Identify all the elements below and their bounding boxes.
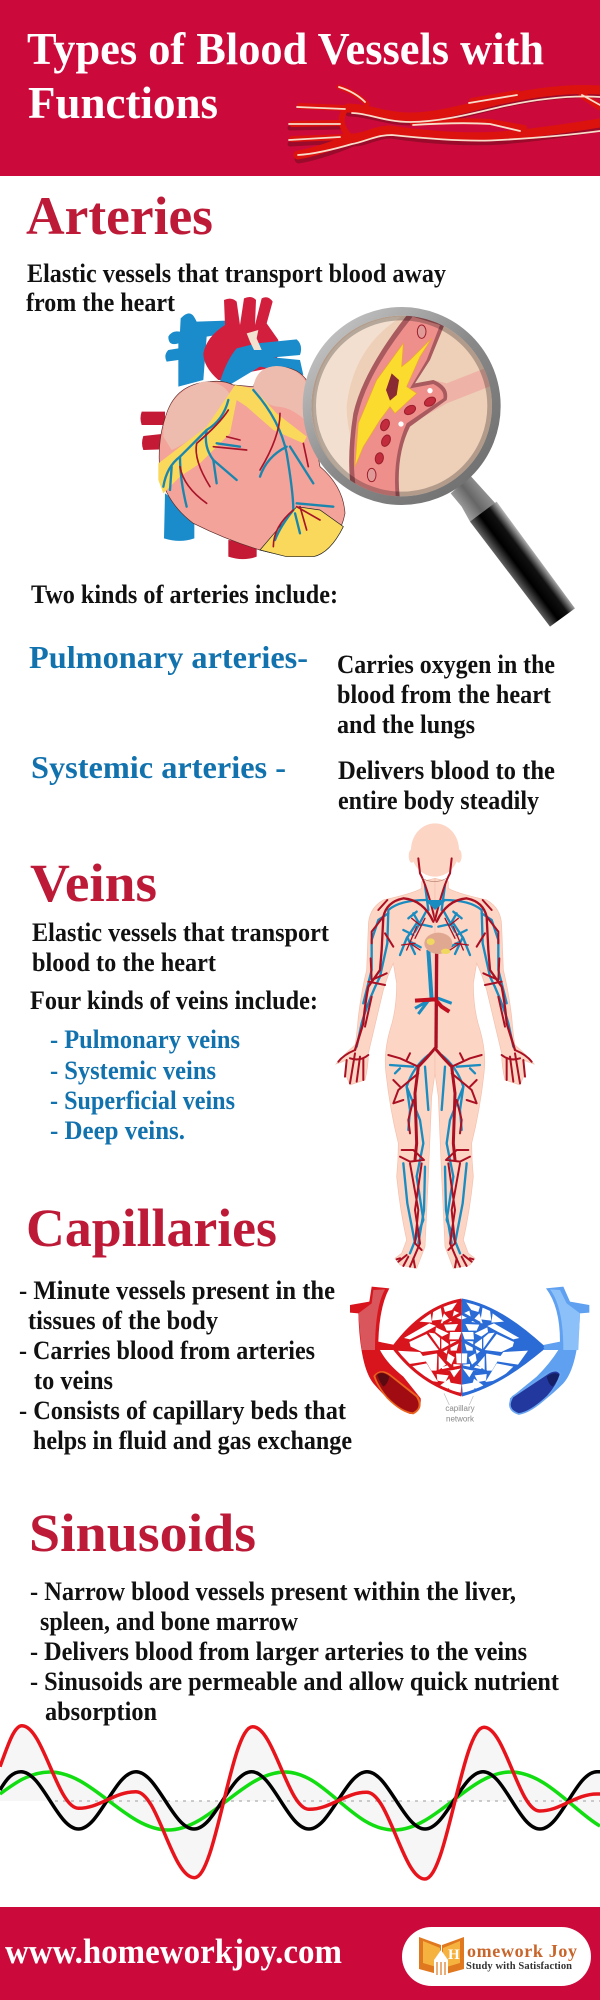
label: capillary network: network	[446, 1415, 474, 1424]
heading: capillaries: Capillaries	[26, 1198, 277, 1258]
title: Functions	[28, 77, 218, 128]
text: logo tagline: Study with Satisfaction	[466, 1961, 572, 1972]
text: pulmonary arteries description: and the lungs	[337, 710, 475, 739]
text: systemic arteries description	[338, 756, 555, 815]
label: systemic arteries: Systemic arteries -	[31, 749, 286, 785]
chart: wave interference curves	[0, 1726, 600, 1879]
footer banner	[0, 1907, 600, 2000]
text: pulmonary arteries description	[337, 650, 555, 739]
list: vein types: - Deep veins.	[50, 1116, 185, 1145]
text: pulmonary arteries description: blood from the heart	[337, 680, 551, 709]
header banner	[0, 0, 600, 176]
text: sinusoids bullet list: - Sinusoids are permeable and allow quick nutrient	[30, 1667, 559, 1696]
heading: veins: Veins	[30, 853, 157, 913]
icon: capillary network diagram	[350, 1287, 589, 1424]
text: pulmonary arteries description: Carries oxygen in the	[337, 650, 555, 679]
text: website url: www.homeworkjoy.com	[5, 1932, 342, 1971]
heading: arteries: Arteries	[26, 186, 213, 246]
heading: sinusoids: Sinusoids	[29, 1503, 256, 1563]
text: arteries description	[26, 259, 446, 317]
text: capillaries bullet list: to veins	[34, 1366, 113, 1395]
icon: magnifying glass over artery	[307, 311, 575, 627]
list: vein types: - Superficial veins	[50, 1086, 235, 1115]
text: capillaries bullet list	[19, 1276, 352, 1455]
text: arteries description: Elastic vessels that transport blood away	[27, 259, 446, 288]
text: arteries description: from the heart	[26, 288, 175, 317]
text: sinusoids bullet list: - Narrow blood vessels present within the liver,	[30, 1577, 516, 1606]
text: sinusoids bullet list	[30, 1577, 559, 1726]
panel: arteries	[26, 186, 575, 815]
text: kinds of veins: Four kinds of veins include:	[30, 986, 318, 1015]
text: kinds of arteries: Two kinds of arteries include:	[31, 580, 338, 609]
list: vein types: - Systemic veins	[50, 1056, 216, 1085]
logo: homework joy	[402, 1927, 591, 1986]
icon: open book: H	[448, 1947, 460, 1963]
label: pulmonary arteries: Pulmonary arteries-	[29, 639, 308, 675]
text: sinusoids bullet list: absorption	[45, 1697, 158, 1726]
curve: red wave	[0, 1726, 600, 1879]
icon: heart illustration	[140, 297, 345, 559]
text: capillaries bullet list: - Minute vessels present in the	[19, 1276, 335, 1305]
label: capillary network	[445, 1404, 475, 1424]
text: systemic arteries description: entire body steadily	[338, 786, 539, 815]
text: capillaries bullet list: - Carries blood from arteries	[19, 1336, 315, 1365]
text: logo name: omework Joy	[467, 1941, 577, 1961]
panel: sinusoids	[0, 1503, 600, 1879]
icon: open book	[419, 1937, 464, 1975]
icon: arm arteries	[289, 87, 600, 159]
panel: veins	[30, 823, 534, 1268]
text: capillaries bullet list: helps in fluid and gas exchange	[33, 1426, 352, 1455]
text: veins description: blood to the heart	[32, 948, 216, 977]
text: capillaries bullet list: tissues of the body	[28, 1306, 218, 1335]
icon: human circulatory system	[336, 823, 534, 1268]
text: systemic arteries description: Delivers blood to the	[338, 756, 555, 785]
list: vein types: - Pulmonary veins	[50, 1025, 240, 1054]
text: sinusoids bullet list: - Delivers blood from larger arteries to the veins	[30, 1637, 527, 1666]
text: veins description	[32, 918, 329, 977]
list: vein types	[50, 1025, 240, 1145]
text: veins description: Elastic vessels that transport	[32, 918, 329, 947]
title	[27, 23, 544, 128]
label: capillary network: capillary	[445, 1404, 475, 1413]
panel: capillaries	[19, 1198, 589, 1455]
curve: green wave	[0, 1772, 600, 1830]
text: sinusoids bullet list: spleen, and bone marrow	[40, 1607, 298, 1636]
title: Types of Blood Vessels with	[27, 23, 544, 74]
text: capillaries bullet list: - Consists of capillary beds that	[19, 1396, 346, 1425]
curve: black wave	[0, 1772, 600, 1829]
